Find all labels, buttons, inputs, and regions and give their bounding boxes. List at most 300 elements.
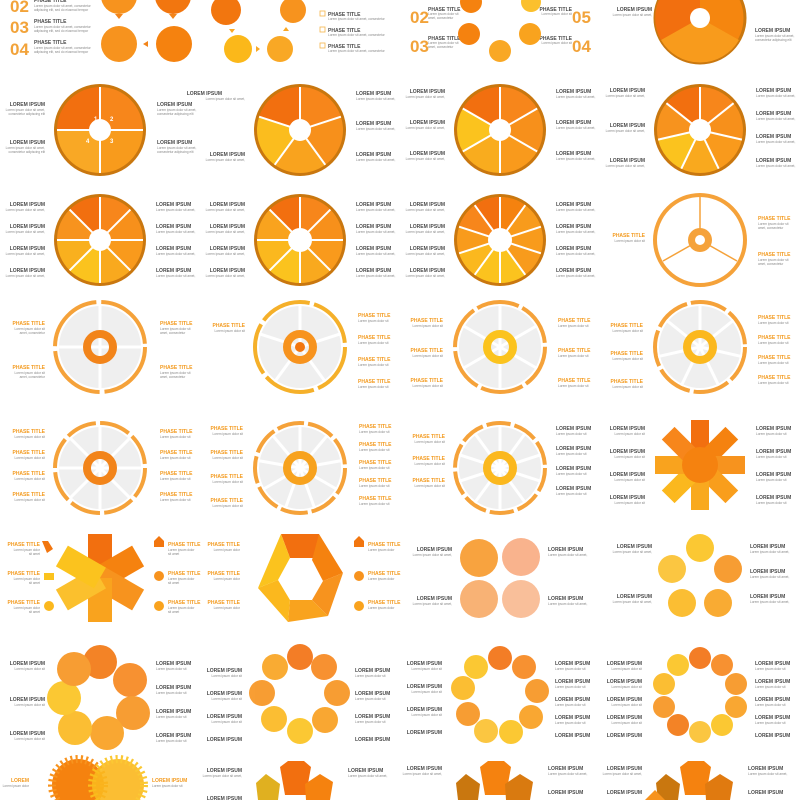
row6 col2: nine blob ring: LOREM IPSUM xyxy=(555,715,590,721)
row1 col0: 4-segment pie: 3 xyxy=(110,139,114,145)
row3 col0: light 4-part wheel: PHASE TITLE xyxy=(12,321,46,327)
row6 col2: nine blob ring: LOREM IPSUM xyxy=(407,684,442,690)
row5 col2: four blobs: LOREM IPSUM xyxy=(548,547,583,553)
row4 col0: light 8-part wheel: Lorem ipsum dolor sit xyxy=(160,456,191,460)
row2 col0: 8-segment pie: LOREM IPSUM xyxy=(10,246,45,252)
row2 col3: light 3-part ring: Lorem ipsum dolor sit xyxy=(758,222,789,226)
row1 col3: 7-segment pie: LOREM IPSUM xyxy=(610,88,645,94)
row6 col0: six blob ring: Lorem ipsum dolor sit xyxy=(156,691,187,695)
row0 col3: three-part pie: LOREM IPSUM xyxy=(617,7,652,13)
row2 col2: 10-segment pie: LOREM IPSUM xyxy=(556,202,591,208)
row3 col0: light 4-part wheel: amet, consectetur xyxy=(20,375,46,379)
row2 col1: 8-segment pie variant: Lorem ipsum dolor sit amet, xyxy=(206,230,245,234)
row3 col2: light 6-part wheel: PHASE TITLE xyxy=(558,348,591,354)
row4 col3: star of rotated squares: LOREM IPSUM xyxy=(756,449,791,455)
row2 col1: 8-segment pie variant: Lorem ipsum dolor sit amet, xyxy=(356,252,395,256)
row2 col2: 10-segment pie: Lorem ipsum dolor sit amet, xyxy=(556,230,595,234)
row4 col3: star of rotated squares: LOREM IPSUM xyxy=(756,472,791,478)
row1 col1: 5-segment pie xyxy=(187,84,395,176)
row1 col0: 4-segment pie: 1 xyxy=(94,117,98,123)
row5 col3: five blobs ring: LOREM IPSUM xyxy=(750,594,785,600)
row2 col1: 8-segment pie variant: Lorem ipsum dolor sit amet, xyxy=(206,274,245,278)
row2 col2: 10-segment pie: LOREM IPSUM xyxy=(410,268,445,274)
row6 col3: ten blob ring: LOREM IPSUM xyxy=(607,715,642,721)
row5 col3: five blobs ring: Lorem ipsum dolor sit amet, xyxy=(750,550,789,554)
row7 col3: pentagon petals: Lorem ipsum dolor sit amet, xyxy=(603,772,642,776)
row4 col1: light 9-part wheel: Lorem ipsum dolor sit xyxy=(359,466,390,470)
row4 col2: light 10-part wheel: PHASE TITLE xyxy=(412,434,446,440)
row5 col1: hexagon ring: PHASE TITLE xyxy=(368,571,401,577)
row1 col0: 4-segment pie xyxy=(6,84,196,176)
row1 col2: 6-segment pie: LOREM IPSUM xyxy=(556,151,591,157)
row4 col0: light 8-part wheel: PHASE TITLE xyxy=(12,450,46,456)
row6 col2: nine blob ring: LOREM IPSUM xyxy=(555,661,590,667)
row2 col1: 8-segment pie variant: Lorem ipsum dolor sit amet, xyxy=(356,208,395,212)
row6 col3: ten blob ring: Lorem ipsum dolor sit xyxy=(755,721,786,725)
row4 col1: light 9-part wheel: Lorem ipsum dolor sit xyxy=(213,456,243,460)
row1 col0: 4-segment pie: Lorem ipsum dolor sit amet, xyxy=(157,108,196,112)
row1 col2: 6-segment pie: LOREM IPSUM xyxy=(410,120,445,126)
row2 col2: 10-segment pie: LOREM IPSUM xyxy=(410,202,445,208)
row5 col1: hexagon ring xyxy=(207,534,401,622)
row4 col3: star of rotated squares: LOREM IPSUM xyxy=(756,426,791,432)
row6 col3: ten blob ring: LOREM IPSUM xyxy=(755,733,790,739)
row4 col2: light 10-part wheel: Lorem ipsum dolor sit xyxy=(556,492,587,496)
row4 col1: light 9-part wheel: Lorem ipsum dolor sit xyxy=(359,430,390,434)
row7 col3: pentagon petals: LOREM IPSUM xyxy=(748,790,783,796)
row2 col1: 8-segment pie variant: Lorem ipsum dolor sit amet, xyxy=(356,230,395,234)
row4 col2: light 10-part wheel: Lorem ipsum dolor sit xyxy=(556,432,587,436)
row5 col3: five blobs ring: LOREM IPSUM xyxy=(617,544,652,550)
row3 col3: light 7-part wheel: Lorem ipsum dolor sit xyxy=(758,321,789,325)
row3 col3: light 7-part wheel: Lorem ipsum dolor sit xyxy=(758,361,789,365)
row0 col2: numbered circle cycle: Lorem ipsum dolor sit xyxy=(542,41,572,45)
row2 col3: light 3-part ring: PHASE TITLE xyxy=(758,252,791,258)
row2 col2: 10-segment pie: LOREM IPSUM xyxy=(410,246,445,252)
row1 col3: 7-segment pie: LOREM IPSUM xyxy=(610,123,645,129)
row0 col2: numbered circle cycle: 02 xyxy=(410,8,429,27)
row3 col2: light 6-part wheel: PHASE TITLE xyxy=(410,378,444,384)
row3 col3: light 7-part wheel: PHASE TITLE xyxy=(758,375,791,381)
row6 col3: ten blob ring: Lorem ipsum dolor sit xyxy=(612,667,642,671)
row5 col1: hexagon ring: PHASE TITLE xyxy=(368,542,401,548)
row0 col0: numbered list with circle flow: PHASE TITLE xyxy=(34,19,67,25)
row3 col3: light 7-part wheel: PHASE TITLE xyxy=(610,323,644,329)
row3 col3: light 7-part wheel: PHASE TITLE xyxy=(758,355,791,361)
row7 col3: pentagon petals: LOREM IPSUM xyxy=(607,766,642,772)
row5 col2: four blobs: LOREM IPSUM xyxy=(548,596,583,602)
row1 col3: 7-segment pie: LOREM IPSUM xyxy=(756,111,791,117)
row2 col0: 8-segment pie: Lorem ipsum dolor sit amet, xyxy=(6,252,45,256)
row5 col1: hexagon ring: Lorem ipsum dolor xyxy=(368,548,395,552)
row7 col3: pentagon petals xyxy=(603,761,787,800)
row1 col0: 4-segment pie: 4 xyxy=(86,139,90,145)
row3 col0: light 4-part wheel: Lorem ipsum dolor sit xyxy=(160,327,191,331)
row1 col3: 7-segment pie: Lorem ipsum dolor sit amet, xyxy=(606,164,645,168)
row4 col3: star of rotated squares: Lorem ipsum dolor sit xyxy=(615,455,645,459)
row3 col3: light 7-part wheel: PHASE TITLE xyxy=(758,335,791,341)
row6 col3: ten blob ring: Lorem ipsum dolor sit xyxy=(612,685,642,689)
row1 col0: 4-segment pie: consectetur adipiscing elit xyxy=(157,150,194,154)
row4 col3: star of rotated squares: Lorem ipsum dolor sit xyxy=(615,501,645,505)
row6 col0: six blob ring: Lorem ipsum dolor sit xyxy=(15,667,45,671)
row3 col0: light 4-part wheel: PHASE TITLE xyxy=(160,365,193,371)
row4 col1: light 9-part wheel: PHASE TITLE xyxy=(210,498,244,504)
row7 col0: starbursts: Lorem ipsum dolor sit xyxy=(152,784,183,788)
row5 col1: hexagon ring: Lorem ipsum dolor xyxy=(214,606,241,610)
row2 col2: 10-segment pie: Lorem ipsum dolor sit amet, xyxy=(406,230,445,234)
row5 col1: hexagon ring: PHASE TITLE xyxy=(368,600,401,606)
row3 col1: light 5-part wheel: Lorem ipsum dolor sit xyxy=(215,329,245,333)
row4 col3: star of rotated squares: Lorem ipsum dolor sit xyxy=(756,478,787,482)
row4 col0: light 8-part wheel: Lorem ipsum dolor sit xyxy=(160,477,191,481)
row7 col3: pentagon petals: LOREM IPSUM xyxy=(748,766,783,772)
row5 col0: radial rectangles star: sit amet xyxy=(168,610,179,614)
row4 col0: light 8-part wheel: PHASE TITLE xyxy=(12,429,46,435)
row2 col1: 8-segment pie variant: LOREM IPSUM xyxy=(356,202,391,208)
row3 col3: light 7-part wheel: Lorem ipsum dolor sit xyxy=(613,385,643,389)
row2 col1: 8-segment pie variant: LOREM IPSUM xyxy=(210,224,245,230)
row5 col1: hexagon ring: PHASE TITLE xyxy=(207,571,241,577)
row7 col3: pentagon petals: Lorem ipsum dolor sit amet, xyxy=(748,772,787,776)
row1 col3: 7-segment pie: LOREM IPSUM xyxy=(756,134,791,140)
row6 col1: eight blob ring: Lorem ipsum dolor sit xyxy=(212,674,242,678)
row2 col1: 8-segment pie variant: LOREM IPSUM xyxy=(356,246,391,252)
row4 col2: light 10-part wheel: Lorem ipsum dolor sit xyxy=(415,440,445,444)
row4 col0: light 8-part wheel: PHASE TITLE xyxy=(160,429,193,435)
row6 col1: eight blob ring: LOREM IPSUM xyxy=(207,737,242,743)
row0 col1: checklist with circle cycle: PHASE TITLE xyxy=(328,12,361,18)
row1 col2: 6-segment pie: LOREM IPSUM xyxy=(556,89,591,95)
row2 col0: 8-segment pie: Lorem ipsum dolor sit amet, xyxy=(6,274,45,278)
row1 col2: 6-segment pie: Lorem ipsum dolor sit amet, xyxy=(556,126,595,130)
row6 col0: six blob ring: Lorem ipsum dolor sit xyxy=(15,703,45,707)
row0 col1: checklist with circle cycle xyxy=(211,0,386,63)
row4 col2: light 10-part wheel: Lorem ipsum dolor sit xyxy=(415,484,445,488)
row4 col0: light 8-part wheel: Lorem ipsum dolor sit xyxy=(15,498,45,502)
row1 col2: 6-segment pie: LOREM IPSUM xyxy=(410,89,445,95)
row0 col2: numbered circle cycle: Lorem ipsum dolor sit xyxy=(428,12,459,16)
row6 col3: ten blob ring: Lorem ipsum dolor sit xyxy=(755,667,786,671)
row6 col1: eight blob ring: LOREM IPSUM xyxy=(207,691,242,697)
row7 col1: pentagon petals: Lorem ipsum dolor sit amet, xyxy=(203,774,242,778)
row0 col0: numbered list with circle flow: Lorem ipsum dolor sit amet, consectetur xyxy=(34,4,92,8)
row0 col2: numbered circle cycle: 05 xyxy=(572,8,591,27)
row6 col0: six blob ring: LOREM IPSUM xyxy=(10,661,45,667)
row4 col2: light 10-part wheel: LOREM IPSUM xyxy=(556,446,591,452)
row1 col3: 7-segment pie: LOREM IPSUM xyxy=(610,158,645,164)
row3 col1: light 5-part wheel: Lorem ipsum dolor sit xyxy=(358,341,389,345)
row7 col2: pentagon petals: LOREM IPSUM xyxy=(548,766,583,772)
row3 col1: light 5-part wheel: Lorem ipsum dolor sit xyxy=(358,363,389,367)
row6 col3: ten blob ring: LOREM IPSUM xyxy=(755,715,790,721)
row1 col0: 4-segment pie: Lorem ipsum dolor sit amet, xyxy=(6,108,45,112)
row2 col1: 8-segment pie variant: LOREM IPSUM xyxy=(356,224,391,230)
row2 col0: 8-segment pie: LOREM IPSUM xyxy=(156,246,191,252)
row4 col2: light 10-part wheel: Lorem ipsum dolor sit xyxy=(415,462,445,466)
row0 col0: numbered list with circle flow: adipiscing elit, sed do eiusmod tempor xyxy=(34,29,89,33)
row4 col1: light 9-part wheel: Lorem ipsum dolor sit xyxy=(213,504,243,508)
row6 col0: six blob ring: Lorem ipsum dolor sit xyxy=(156,715,187,719)
row4 col0: light 8-part wheel: PHASE TITLE xyxy=(160,471,193,477)
row0 col2: numbered circle cycle: Lorem ipsum dolor sit xyxy=(542,12,572,16)
row7 col2: pentagon petals xyxy=(403,761,587,800)
row5 col2: four blobs xyxy=(413,538,587,618)
row0 col2: numbered circle cycle: PHASE TITLE xyxy=(428,36,461,42)
row4 col0: light 8-part wheel: Lorem ipsum dolor sit xyxy=(160,435,191,439)
row5 col1: hexagon ring: Lorem ipsum dolor xyxy=(368,606,395,610)
row2 col1: 8-segment pie variant: Lorem ipsum dolor sit amet, xyxy=(206,208,245,212)
row0 col0: numbered list with circle flow: 03 xyxy=(10,18,29,37)
row1 col1: 5-segment pie: LOREM IPSUM xyxy=(187,91,222,97)
row0 col2: numbered circle cycle: amet, consectetur xyxy=(428,16,454,20)
row4 col2: light 10-part wheel: PHASE TITLE xyxy=(412,456,446,462)
row7 col2: pentagon petals: Lorem ipsum dolor sit amet, xyxy=(403,772,442,776)
row1 col2: 6-segment pie: Lorem ipsum dolor sit amet, xyxy=(556,157,595,161)
row6 col0: six blob ring: Lorem ipsum dolor sit xyxy=(156,739,187,743)
row7 col0: starbursts: LOREM xyxy=(11,778,29,784)
row2 col1: 8-segment pie variant: Lorem ipsum dolor sit amet, xyxy=(356,274,395,278)
row2 col1: 8-segment pie variant xyxy=(206,194,395,286)
row5 col3: five blobs ring: Lorem ipsum dolor sit amet, xyxy=(750,575,789,579)
row3 col1: light 5-part wheel: Lorem ipsum dolor sit xyxy=(358,319,389,323)
row2 col1: 8-segment pie variant: Lorem ipsum dolor sit amet, xyxy=(206,252,245,256)
row7 col0: starbursts: Lorem ipsum dolor xyxy=(3,784,30,788)
row1 col3: 7-segment pie: Lorem ipsum dolor sit amet, xyxy=(756,164,795,168)
row2 col1: 8-segment pie variant: LOREM IPSUM xyxy=(356,268,391,274)
row3 col3: light 7-part wheel: Lorem ipsum dolor sit xyxy=(613,329,643,333)
row5 col3: five blobs ring: Lorem ipsum dolor sit amet, xyxy=(613,600,652,604)
row4 col1: light 9-part wheel: Lorem ipsum dolor sit xyxy=(359,484,390,488)
row2 col1: 8-segment pie variant: LOREM IPSUM xyxy=(210,246,245,252)
row4 col2: light 10-part wheel: LOREM IPSUM xyxy=(556,486,591,492)
row4 col0: light 8-part wheel: Lorem ipsum dolor sit xyxy=(15,456,45,460)
row6 col1: eight blob ring: LOREM IPSUM xyxy=(355,714,390,720)
row7 col3: pentagon petals: LOREM IPSUM xyxy=(607,790,642,796)
row7 col1: pentagon petals: Lorem ipsum dolor sit amet, xyxy=(348,774,387,778)
row2 col3: light 3-part ring: amet, consectetur xyxy=(758,226,784,230)
row2 col2: 10-segment pie: Lorem ipsum dolor sit amet, xyxy=(406,274,445,278)
row6 col1: eight blob ring: LOREM IPSUM xyxy=(355,668,390,674)
row1 col1: 5-segment pie: Lorem ipsum dolor sit amet, xyxy=(356,158,395,162)
row0 col2: numbered circle cycle: 04 xyxy=(572,37,591,56)
row0 col3: three-part pie: LOREM IPSUM xyxy=(755,28,790,34)
row7 col2: pentagon petals: LOREM IPSUM xyxy=(407,766,442,772)
row5 col3: five blobs ring: LOREM IPSUM xyxy=(750,544,785,550)
row1 col3: 7-segment pie: LOREM IPSUM xyxy=(756,158,791,164)
row3 col2: light 6-part wheel: Lorem ipsum dolor sit xyxy=(413,324,443,328)
row4 col0: light 8-part wheel: Lorem ipsum dolor sit xyxy=(15,435,45,439)
row4 col3: star of rotated squares: Lorem ipsum dolor sit xyxy=(756,501,787,505)
row4 col1: light 9-part wheel: PHASE TITLE xyxy=(210,426,244,432)
row2 col2: 10-segment pie: LOREM IPSUM xyxy=(556,268,591,274)
row6 col3: ten blob ring: LOREM IPSUM xyxy=(607,679,642,685)
row3 col3: light 7-part wheel xyxy=(610,302,791,392)
row4 col0: light 8-part wheel: Lorem ipsum dolor sit xyxy=(15,477,45,481)
row5 col1: hexagon ring: PHASE TITLE xyxy=(207,600,241,606)
row6 col2: nine blob ring: LOREM IPSUM xyxy=(555,733,590,739)
row2 col2: 10-segment pie: Lorem ipsum dolor sit amet, xyxy=(406,252,445,256)
row4 col3: star of rotated squares: LOREM IPSUM xyxy=(756,495,791,501)
row5 col0: radial rectangles star: PHASE TITLE xyxy=(168,600,201,606)
row3 col0: light 4-part wheel xyxy=(12,302,193,392)
row4 col1: light 9-part wheel: PHASE TITLE xyxy=(359,478,392,484)
row4 col3: star of rotated squares: LOREM IPSUM xyxy=(610,472,645,478)
row4 col1: light 9-part wheel: Lorem ipsum dolor sit xyxy=(213,480,243,484)
row6 col2: nine blob ring: LOREM IPSUM xyxy=(407,661,442,667)
row2 col2: 10-segment pie xyxy=(406,194,595,286)
row6 col2: nine blob ring: Lorem ipsum dolor sit xyxy=(412,667,442,671)
row2 col1: 8-segment pie variant: LOREM IPSUM xyxy=(210,202,245,208)
row5 col2: four blobs: LOREM IPSUM xyxy=(417,547,452,553)
row6 col1: eight blob ring: Lorem ipsum dolor sit xyxy=(355,674,386,678)
row5 col0: radial rectangles star xyxy=(7,534,201,622)
row4 col3: star of rotated squares: LOREM IPSUM xyxy=(610,495,645,501)
row1 col2: 6-segment pie: Lorem ipsum dolor sit amet, xyxy=(556,95,595,99)
row4 col1: light 9-part wheel: Lorem ipsum dolor sit xyxy=(359,502,390,506)
row2 col1: 8-segment pie variant: LOREM IPSUM xyxy=(210,268,245,274)
row0 col0: numbered list with circle flow: 04 xyxy=(10,40,29,59)
row6 col2: nine blob ring: Lorem ipsum dolor sit xyxy=(412,713,442,717)
row4 col2: light 10-part wheel: Lorem ipsum dolor sit xyxy=(556,472,587,476)
row6 col3: ten blob ring: LOREM IPSUM xyxy=(607,697,642,703)
row6 col2: nine blob ring xyxy=(407,646,590,744)
row6 col2: nine blob ring: Lorem ipsum dolor sit xyxy=(555,667,586,671)
row6 col3: ten blob ring: LOREM IPSUM xyxy=(607,661,642,667)
row3 col0: light 4-part wheel: PHASE TITLE xyxy=(12,365,46,371)
row6 col2: nine blob ring: Lorem ipsum dolor sit xyxy=(555,721,586,725)
row5 col2: four blobs: Lorem ipsum dolor sit amet, xyxy=(413,602,452,606)
row0 col3: three-part pie xyxy=(613,0,794,63)
row4 col1: light 9-part wheel: PHASE TITLE xyxy=(210,450,244,456)
row4 col0: light 8-part wheel: PHASE TITLE xyxy=(12,492,46,498)
row5 col0: radial rectangles star: sit amet xyxy=(29,610,40,614)
row6 col0: six blob ring: LOREM IPSUM xyxy=(10,697,45,703)
row5 col0: radial rectangles star: sit amet xyxy=(29,581,40,585)
row0 col1: checklist with circle cycle: Lorem ipsum dolor sit amet, consectetur xyxy=(328,17,386,21)
row0 col1: checklist with circle cycle: PHASE TITLE xyxy=(328,28,361,34)
row5 col0: radial rectangles star: Lorem ipsum dolor xyxy=(14,548,41,552)
row3 col3: light 7-part wheel: PHASE TITLE xyxy=(610,379,644,385)
row3 col2: light 6-part wheel xyxy=(410,302,591,392)
row5 col1: hexagon ring: PHASE TITLE xyxy=(207,542,241,548)
row0 col3: three-part pie: Lorem ipsum dolor sit amet, xyxy=(613,13,652,17)
row1 col3: 7-segment pie: Lorem ipsum dolor sit amet, xyxy=(756,117,795,121)
row6 col0: six blob ring: LOREM IPSUM xyxy=(10,731,45,737)
row7 col2: pentagon petals: LOREM IPSUM xyxy=(548,790,583,796)
row5 col0: radial rectangles star: PHASE TITLE xyxy=(168,542,201,548)
row2 col0: 8-segment pie: Lorem ipsum dolor sit amet, xyxy=(156,252,195,256)
row3 col3: light 7-part wheel: Lorem ipsum dolor sit xyxy=(758,341,789,345)
row0 col2: numbered circle cycle: PHASE TITLE xyxy=(539,7,573,13)
row2 col0: 8-segment pie: LOREM IPSUM xyxy=(10,268,45,274)
row5 col2: four blobs: Lorem ipsum dolor sit amet, xyxy=(548,553,587,557)
row3 col0: light 4-part wheel: Lorem ipsum dolor sit xyxy=(160,371,191,375)
row1 col2: 6-segment pie: LOREM IPSUM xyxy=(410,151,445,157)
row3 col1: light 5-part wheel: PHASE TITLE xyxy=(358,357,391,363)
row6 col0: six blob ring xyxy=(10,645,191,750)
row0 col2: numbered circle cycle: amet, consectetur xyxy=(428,45,454,49)
row7 col2: pentagon petals: Lorem ipsum dolor sit amet, xyxy=(548,772,587,776)
row1 col1: 5-segment pie: Lorem ipsum dolor sit amet, xyxy=(206,97,245,101)
row0 col3: three-part pie: Lorem ipsum dolor sit amet, xyxy=(755,34,794,38)
row6 col0: six blob ring: LOREM IPSUM xyxy=(156,685,191,691)
row6 col3: ten blob ring: Lorem ipsum dolor sit xyxy=(612,703,642,707)
row6 col1: eight blob ring: LOREM IPSUM xyxy=(355,737,390,743)
row2 col3: light 3-part ring: Lorem ipsum dolor sit xyxy=(758,258,789,262)
row4 col1: light 9-part wheel: PHASE TITLE xyxy=(359,442,392,448)
row5 col2: four blobs: LOREM IPSUM xyxy=(417,596,452,602)
row6 col0: six blob ring: Lorem ipsum dolor sit xyxy=(15,737,45,741)
row6 col3: ten blob ring: LOREM IPSUM xyxy=(755,679,790,685)
row0 col0: numbered list with circle flow: Lorem ipsum dolor sit amet, consectetur xyxy=(34,46,92,50)
row6 col1: eight blob ring: LOREM IPSUM xyxy=(207,714,242,720)
row1 col1: 5-segment pie: LOREM IPSUM xyxy=(356,152,391,158)
row4 col3: star of rotated squares: LOREM IPSUM xyxy=(610,449,645,455)
row3 col1: light 5-part wheel: PHASE TITLE xyxy=(358,379,391,385)
row5 col0: radial rectangles star: Lorem ipsum dolor xyxy=(168,606,195,610)
row2 col2: 10-segment pie: LOREM IPSUM xyxy=(556,224,591,230)
row5 col3: five blobs ring: LOREM IPSUM xyxy=(617,594,652,600)
row6 col3: ten blob ring: Lorem ipsum dolor sit xyxy=(755,703,786,707)
row4 col3: star of rotated squares: LOREM IPSUM xyxy=(610,426,645,432)
row5 col0: radial rectangles star: sit amet xyxy=(168,552,179,556)
row1 col0: 4-segment pie: consectetur adipiscing elit xyxy=(8,112,45,116)
row2 col0: 8-segment pie xyxy=(6,194,195,286)
row4 col1: light 9-part wheel: PHASE TITLE xyxy=(359,424,392,430)
row0 col0: numbered list with circle flow: adipiscing elit, sed do eiusmod tempor xyxy=(34,50,89,54)
row2 col0: 8-segment pie: LOREM IPSUM xyxy=(10,202,45,208)
row2 col3: light 3-part ring: Lorem ipsum dolor sit xyxy=(615,239,645,243)
row0 col3: three-part pie: consectetur adipiscing elit xyxy=(755,38,792,42)
row2 col2: 10-segment pie: LOREM IPSUM xyxy=(556,246,591,252)
row4 col1: light 9-part wheel: PHASE TITLE xyxy=(359,460,392,466)
row1 col0: 4-segment pie: LOREM IPSUM xyxy=(10,140,45,146)
row2 col0: 8-segment pie: LOREM IPSUM xyxy=(156,268,191,274)
row5 col3: five blobs ring xyxy=(613,534,789,617)
row3 col1: light 5-part wheel: PHASE TITLE xyxy=(358,313,391,319)
row5 col0: radial rectangles star: sit amet xyxy=(168,581,179,585)
row4 col0: light 8-part wheel: PHASE TITLE xyxy=(12,471,46,477)
row3 col0: light 4-part wheel: PHASE TITLE xyxy=(160,321,193,327)
row5 col0: radial rectangles star: PHASE TITLE xyxy=(7,571,41,577)
row2 col0: 8-segment pie: Lorem ipsum dolor sit amet, xyxy=(6,230,45,234)
row2 col2: 10-segment pie: Lorem ipsum dolor sit amet, xyxy=(556,274,595,278)
row3 col2: light 6-part wheel: Lorem ipsum dolor sit xyxy=(558,354,589,358)
row4 col1: light 9-part wheel: Lorem ipsum dolor sit xyxy=(359,448,390,452)
row1 col0: 4-segment pie: LOREM IPSUM xyxy=(157,102,192,108)
row4 col0: light 8-part wheel: PHASE TITLE xyxy=(160,450,193,456)
row7 col1: pentagon petals xyxy=(203,761,387,800)
row6 col0: six blob ring: LOREM IPSUM xyxy=(156,661,191,667)
row5 col0: radial rectangles star: Lorem ipsum dolor xyxy=(14,577,41,581)
row2 col3: light 3-part ring: amet, consectetur xyxy=(758,262,784,266)
row1 col2: 6-segment pie: LOREM IPSUM xyxy=(556,120,591,126)
row4 col1: light 9-part wheel xyxy=(210,423,392,513)
row0 col1: checklist with circle cycle: Lorem ipsum dolor sit amet, consectetur xyxy=(328,33,386,37)
row6 col2: nine blob ring: Lorem ipsum dolor sit xyxy=(555,685,586,689)
row6 col2: nine blob ring: Lorem ipsum dolor sit xyxy=(412,690,442,694)
row2 col3: light 3-part ring xyxy=(612,195,791,285)
row5 col1: hexagon ring: Lorem ipsum dolor xyxy=(368,577,395,581)
row6 col2: nine blob ring: LOREM IPSUM xyxy=(407,707,442,713)
row1 col0: 4-segment pie: Lorem ipsum dolor sit amet, xyxy=(157,146,196,150)
row1 col2: 6-segment pie: Lorem ipsum dolor sit amet, xyxy=(406,95,445,99)
row5 col1: hexagon ring: Lorem ipsum dolor xyxy=(214,548,241,552)
row1 col1: 5-segment pie: Lorem ipsum dolor sit amet, xyxy=(356,127,395,131)
row0 col2: numbered circle cycle: PHASE TITLE xyxy=(428,7,461,13)
row0 col2: numbered circle cycle: 03 xyxy=(410,37,429,56)
